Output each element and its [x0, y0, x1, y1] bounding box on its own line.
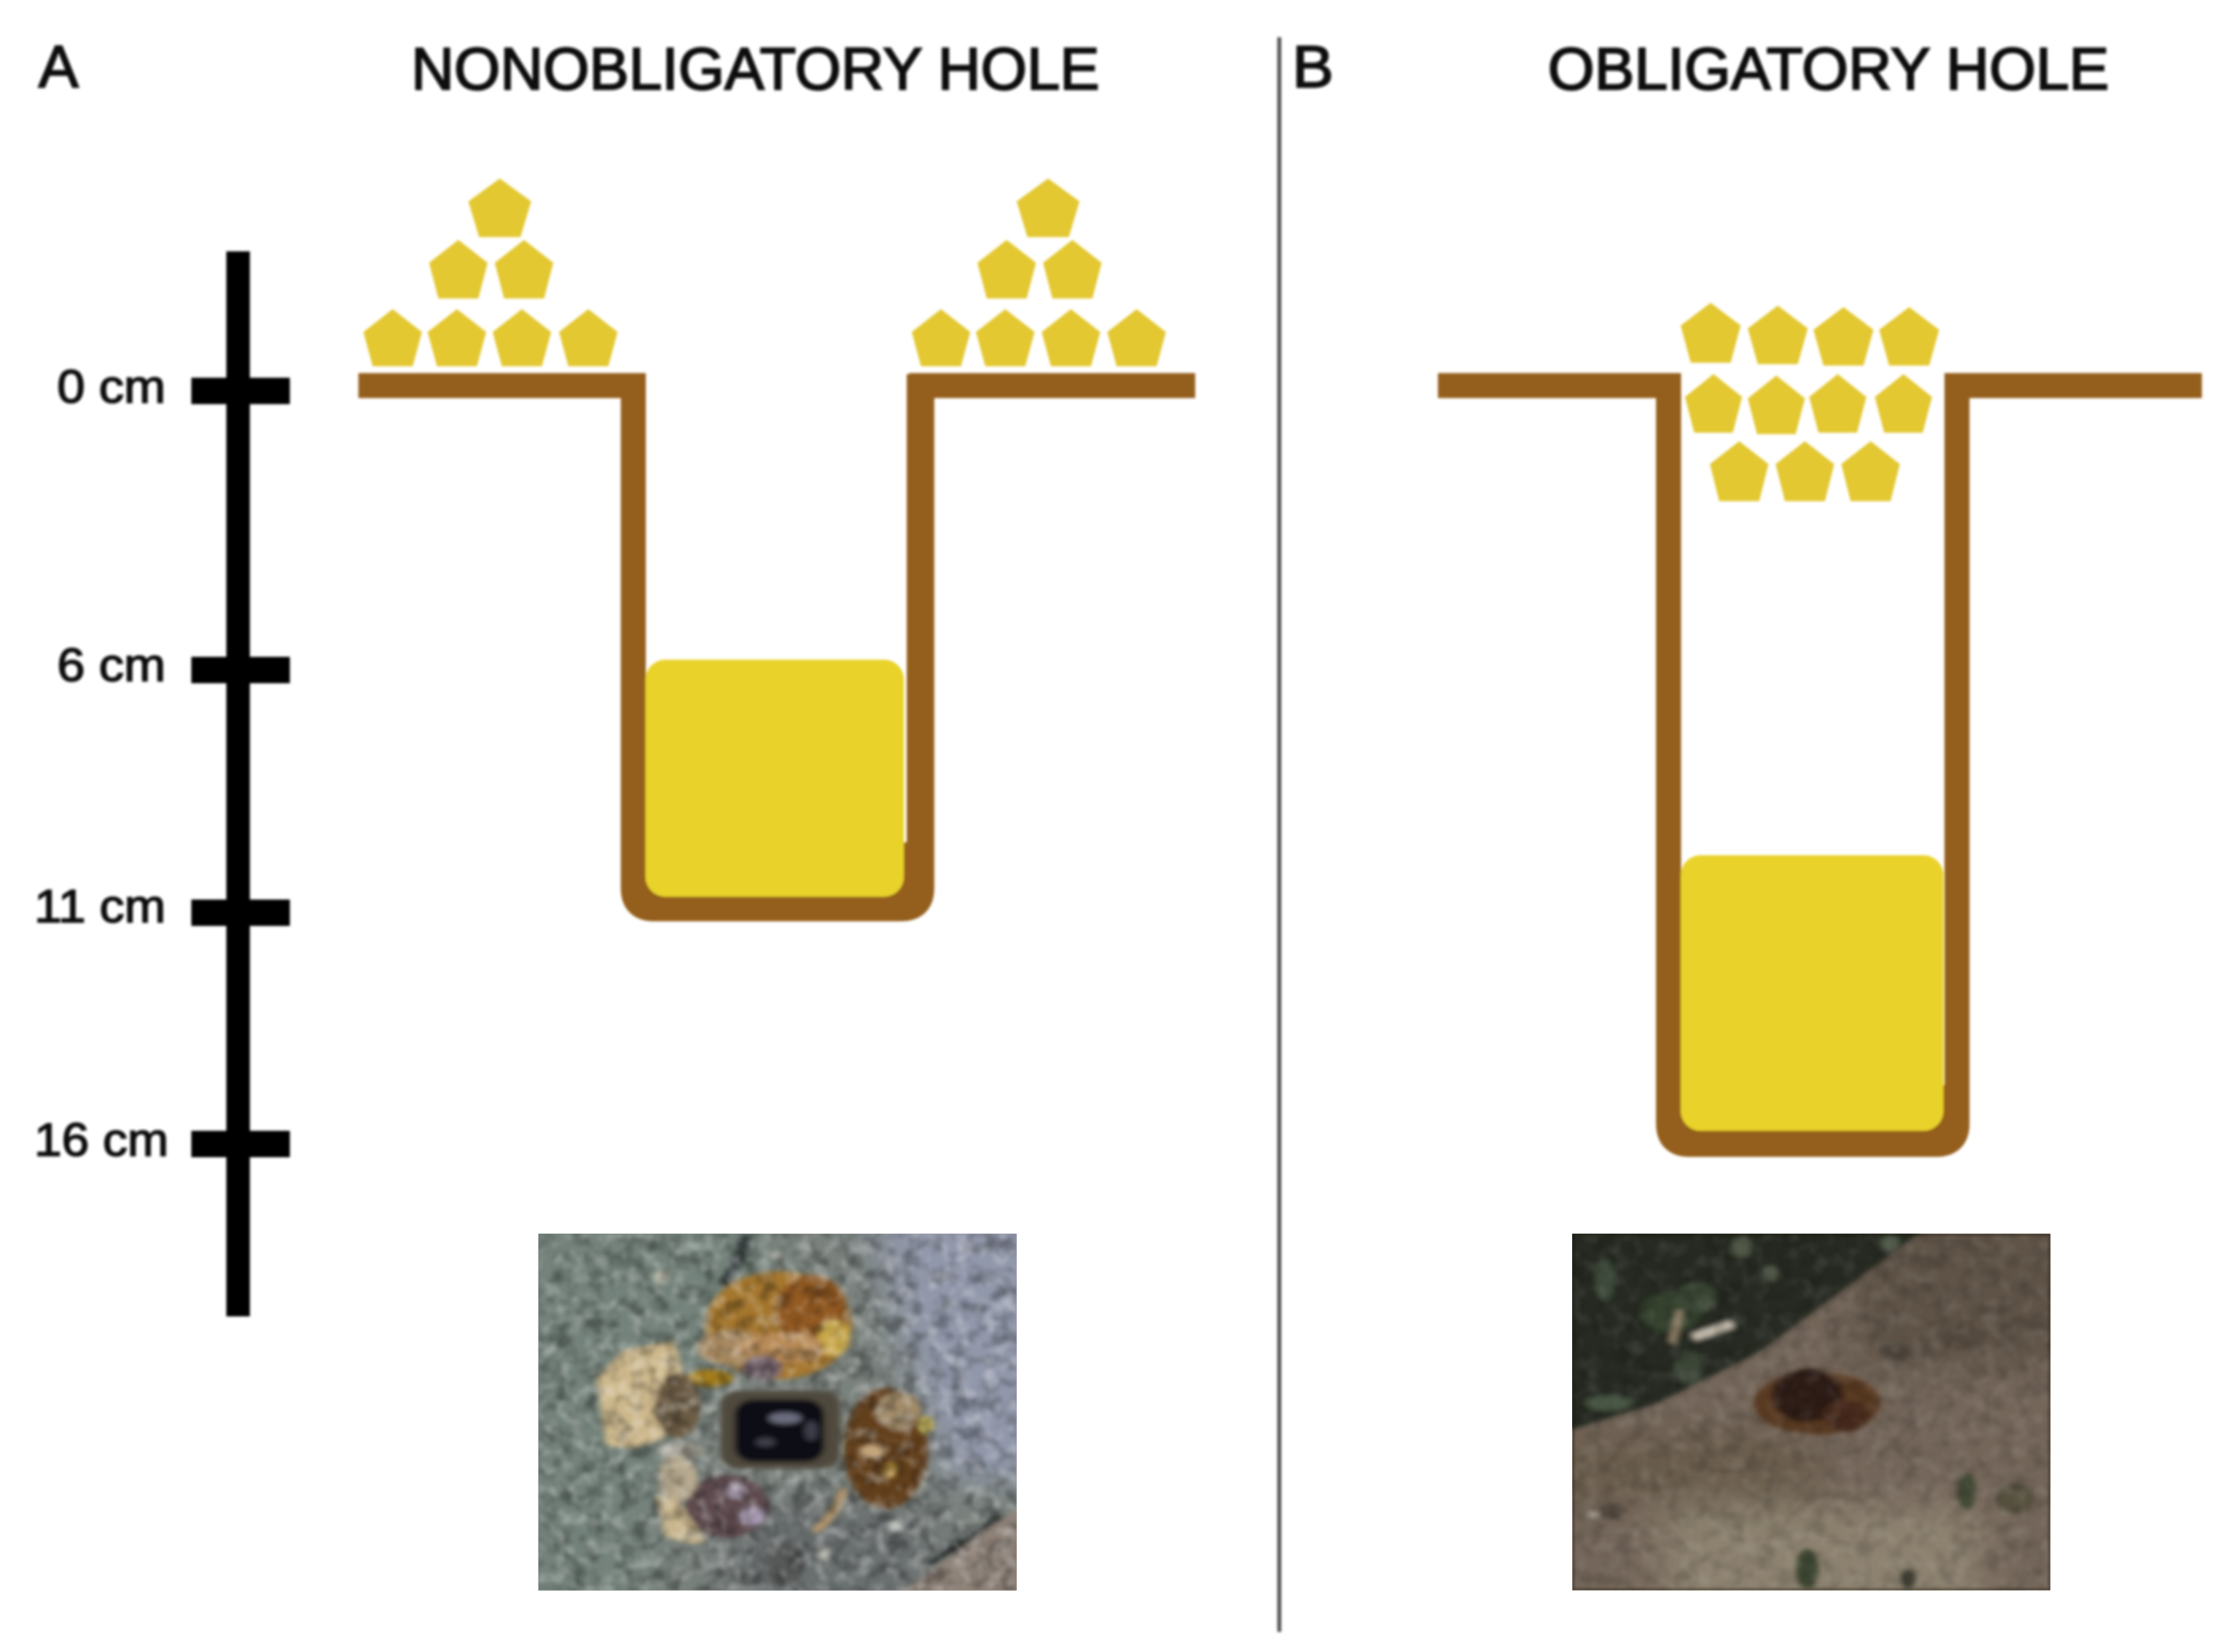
tick 0 cm: 0 cm	[57, 361, 165, 413]
tick 16 cm	[34, 1114, 290, 1166]
right pile of resin pellets	[912, 179, 1166, 367]
nonobligatory hole diagram	[359, 179, 1195, 909]
right resin collar	[844, 1388, 929, 1508]
tick 0 cm	[57, 361, 290, 413]
pellets inside hole	[1681, 302, 1939, 501]
hole wall and ground	[359, 385, 1195, 909]
hole wall and ground	[1438, 385, 2202, 1144]
photo: obligatory hole entrance	[1572, 1233, 2051, 1591]
tick 11 cm	[34, 881, 290, 933]
resin collar	[1754, 1371, 1880, 1435]
honey fill	[1681, 856, 1943, 1131]
tick 16 cm: 16 cm	[34, 1114, 168, 1166]
pale wax left	[596, 1340, 684, 1449]
tick 6 cm	[57, 640, 290, 692]
scale axis	[227, 251, 250, 1316]
bark pits	[1880, 1342, 1910, 1359]
foliage	[1596, 1260, 1614, 1300]
honey fill	[646, 659, 904, 896]
lower resin collar	[684, 1475, 769, 1538]
photo: nonobligatory hole entrance	[538, 1233, 1017, 1591]
tick 11 cm: 11 cm	[34, 881, 165, 933]
light specks	[654, 1270, 668, 1285]
upper resin collar	[706, 1271, 852, 1379]
left pile of resin pellets	[364, 179, 617, 367]
pale twig	[1693, 1324, 1732, 1337]
hole entrance	[720, 1390, 840, 1468]
tick 6 cm: 6 cm	[57, 640, 165, 692]
photo edge	[1573, 1234, 2050, 1590]
panel divider	[1277, 37, 1281, 1632]
bark cracks	[723, 1234, 746, 1285]
panel label A: A	[39, 34, 79, 101]
obligatory hole diagram	[1438, 302, 2202, 1144]
heading: nonobligatory hole: NONOBLIGATORY HOLE	[411, 36, 1100, 103]
depth scale	[34, 251, 290, 1316]
heading: obligatory hole: OBLIGATORY HOLE	[1548, 36, 2109, 103]
panel label B: B	[1292, 34, 1334, 101]
